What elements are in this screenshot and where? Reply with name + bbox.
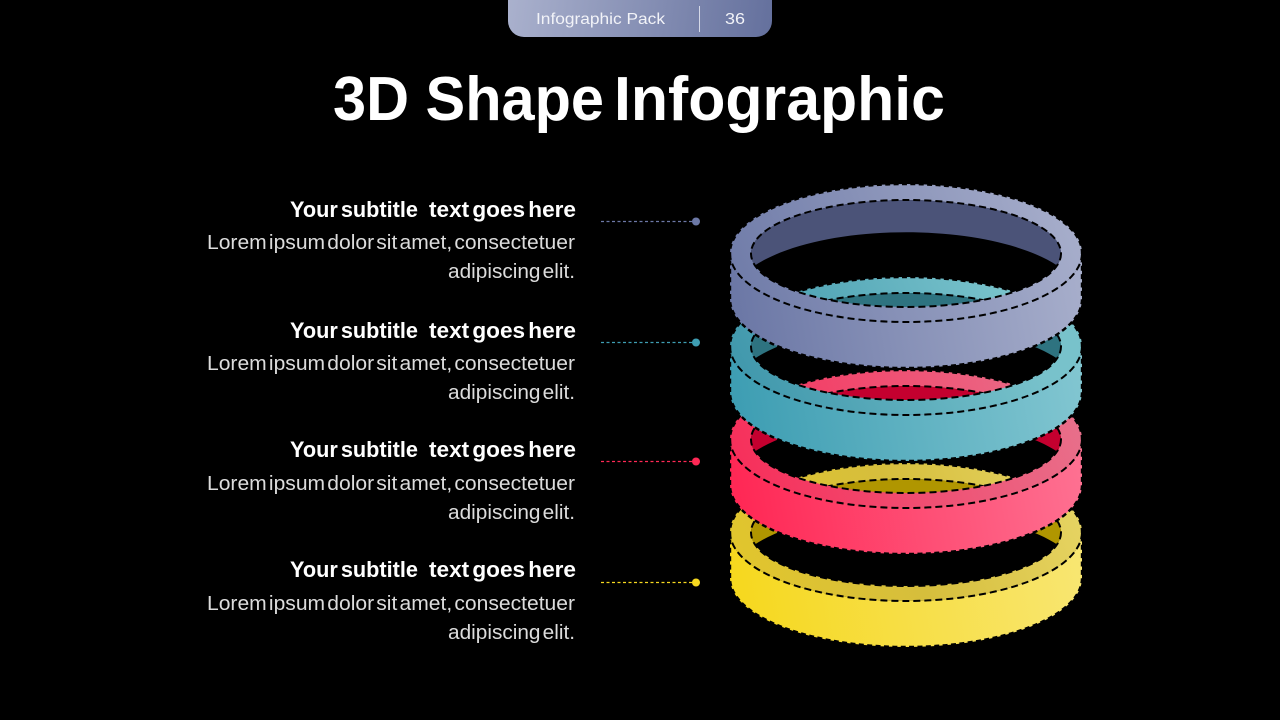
text block: item 3: adipiscing elit. bbox=[448, 502, 575, 524]
text block: item 3: Your subtitle bbox=[290, 437, 418, 462]
connector: item 3 bbox=[601, 458, 700, 466]
connector: item 1 bbox=[601, 218, 700, 226]
text block: item 2: Lorem ipsum dolor sit amet, consectetuer bbox=[207, 353, 575, 375]
ring: blue bbox=[730, 184, 1082, 368]
text block: item 2: text goes here bbox=[429, 318, 576, 343]
header badge bbox=[508, 0, 772, 37]
header badge: Infographic Pack bbox=[536, 11, 666, 28]
connector: item 4 bbox=[601, 578, 700, 586]
text block: item 4 bbox=[207, 557, 576, 644]
ring: red bbox=[730, 370, 1082, 554]
text block: item 1: text goes here bbox=[429, 197, 576, 222]
text block: item 1: Lorem ipsum dolor sit amet, consectetuer bbox=[207, 232, 575, 254]
text block: item 1 bbox=[207, 197, 576, 283]
text block: item 2: adipiscing elit. bbox=[448, 382, 575, 404]
title: Infographic bbox=[614, 65, 945, 134]
ring: teal bbox=[730, 277, 1082, 461]
text block: item 3: text goes here bbox=[429, 437, 576, 462]
text block: item 3 bbox=[207, 437, 576, 524]
text block: item 1: Your subtitle bbox=[290, 197, 418, 222]
text block: item 2: Your subtitle bbox=[290, 318, 418, 343]
text block: item 2 bbox=[207, 318, 576, 404]
text block: item 4: Your subtitle bbox=[290, 557, 418, 582]
text block: item 4: Lorem ipsum dolor sit amet, consectetuer bbox=[207, 593, 575, 615]
text block: item 3: Lorem ipsum dolor sit amet, consectetuer bbox=[207, 473, 575, 495]
title bbox=[333, 65, 945, 134]
header badge: 36 bbox=[725, 11, 745, 28]
title: 3D Shape bbox=[333, 65, 604, 134]
connector: item 2 bbox=[601, 338, 700, 346]
text block: item 4: adipiscing elit. bbox=[448, 622, 575, 644]
text block: item 1: adipiscing elit. bbox=[448, 261, 575, 283]
ring: yellow bbox=[730, 463, 1082, 647]
text block: item 4: text goes here bbox=[429, 557, 576, 582]
